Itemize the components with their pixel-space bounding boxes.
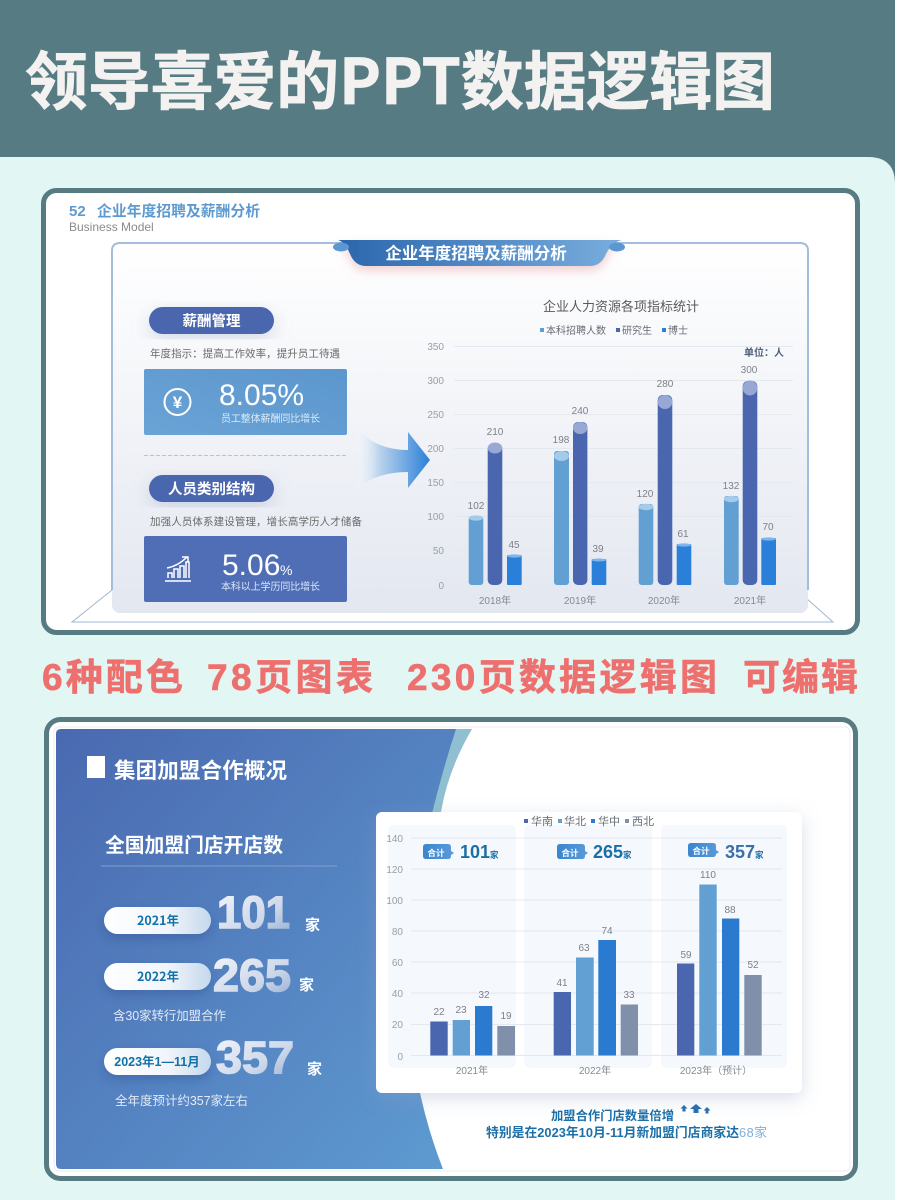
stat row: 2023: 357 bbox=[216, 1032, 294, 1083]
stat card: salary growth: 8.05% bbox=[219, 379, 304, 412]
bars 2020: 280 bbox=[657, 379, 674, 390]
icon: yen coin: ¥ bbox=[173, 393, 183, 412]
bars 2021: 300 bbox=[741, 365, 758, 376]
title: 领导喜爱的PPT数据逻辑图 bbox=[25, 32, 775, 123]
bars 2021 bbox=[723, 365, 776, 585]
stat row: 2022 bbox=[104, 950, 314, 1001]
bars 2022: 33 bbox=[623, 990, 635, 1001]
bars 2021 bbox=[430, 990, 515, 1056]
y axis labels: 50 bbox=[433, 546, 444, 557]
y axis labels: 140 bbox=[386, 834, 403, 845]
y axis labels bbox=[427, 342, 444, 592]
slide subheading: Business Model bbox=[69, 220, 154, 234]
teal curved band bbox=[400, 729, 472, 840]
x axis labels: 2018年 bbox=[479, 594, 511, 607]
bars 2019: 39 bbox=[592, 544, 604, 555]
perspective floor bbox=[72, 590, 833, 622]
stat card: salary growth bbox=[144, 369, 347, 435]
y axis labels: 0 bbox=[397, 1052, 403, 1063]
stat row: 2021: 家 bbox=[305, 914, 320, 935]
y axis labels: 300 bbox=[427, 376, 444, 387]
note: 2023: 全年度预计约357家左右 bbox=[115, 1093, 248, 1108]
legend bbox=[524, 814, 654, 828]
total tag 2023 bbox=[688, 842, 764, 862]
bars 2021: 70 bbox=[762, 522, 774, 533]
y axis labels: 150 bbox=[427, 478, 444, 489]
total tag 2023: 357 bbox=[725, 842, 755, 862]
bars 2021: 132 bbox=[723, 481, 740, 492]
total tag 2023: 合计 bbox=[692, 845, 710, 857]
bars 2023: 110 bbox=[700, 870, 716, 881]
stat card: education growth: 5.06 bbox=[222, 549, 280, 582]
x axis labels bbox=[479, 594, 766, 607]
bars 2023: 59 bbox=[680, 950, 692, 961]
stat row: 2023 bbox=[104, 1032, 322, 1083]
stat card: education growth: % bbox=[280, 562, 292, 578]
bars 2021: 23 bbox=[455, 1005, 467, 1016]
y axis labels: 20 bbox=[392, 1020, 403, 1031]
total tag 2021 bbox=[423, 842, 499, 862]
icon: up arrows bbox=[680, 1104, 710, 1114]
icon: rising bars bbox=[165, 557, 191, 581]
y axis labels: 100 bbox=[386, 896, 403, 907]
banner: selling points: 78页图表 bbox=[207, 657, 373, 698]
arrow bbox=[353, 423, 430, 490]
bars 2021: 19 bbox=[500, 1011, 512, 1022]
bars 2022: 74 bbox=[601, 926, 613, 937]
subheading: 全国加盟门店开店数 bbox=[105, 829, 283, 858]
banner: selling points: 6种配色 bbox=[42, 657, 183, 698]
conclusion text bbox=[486, 1108, 767, 1140]
y axis labels: 120 bbox=[386, 865, 403, 876]
slide title: 集团加盟合作概况 bbox=[114, 754, 287, 785]
blue curved background bbox=[56, 729, 456, 1169]
pill: staff structure bbox=[149, 475, 274, 502]
legend: 华南 bbox=[531, 814, 553, 828]
x axis labels: 2021年 bbox=[456, 1064, 488, 1077]
stat row: 2022: 家 bbox=[299, 974, 314, 995]
staff note: 加强人员体系建设管理，增长高学历人才储备 bbox=[150, 515, 362, 528]
stat row: 2022: 2022年 bbox=[137, 966, 179, 985]
chart card: stores by region bbox=[376, 812, 802, 1093]
legend: 本科招聘人数 bbox=[546, 324, 606, 337]
unit label: 单位：人 bbox=[744, 346, 784, 359]
bars 2022: 41 bbox=[556, 978, 568, 989]
bars 2020: 120 bbox=[637, 489, 654, 500]
bars 2018: 45 bbox=[508, 540, 520, 551]
legend: 华中 bbox=[598, 814, 620, 828]
y axis labels: 100 bbox=[427, 512, 444, 523]
x axis labels: 2020年 bbox=[648, 594, 680, 607]
inner slide card bbox=[112, 243, 808, 613]
total tag 2022 bbox=[557, 842, 632, 862]
stat row: 2021 bbox=[104, 887, 320, 938]
banner: selling points: 可编辑 bbox=[743, 657, 858, 698]
panel: recruitment and salary slide bbox=[44, 190, 858, 632]
chart: HR indicators bbox=[427, 299, 793, 607]
y axis labels bbox=[386, 834, 403, 1063]
y axis labels: 200 bbox=[427, 444, 444, 455]
bars 2020 bbox=[637, 379, 691, 585]
legend: 华北 bbox=[564, 814, 586, 828]
bars 2023 bbox=[677, 870, 762, 1056]
legend: 研究生 bbox=[622, 324, 652, 337]
legend bbox=[540, 324, 688, 337]
bars 2020: 61 bbox=[677, 529, 689, 540]
x axis labels: 2021年 bbox=[734, 594, 766, 607]
bars 2019: 240 bbox=[572, 406, 589, 417]
total tag 2021: 101 bbox=[460, 842, 490, 862]
total tag 2021: 家 bbox=[490, 849, 499, 861]
salary note: 年度指示：提高工作效率，提升员工待遇 bbox=[150, 347, 340, 360]
bars 2021: 32 bbox=[478, 990, 490, 1001]
pill: salary management bbox=[149, 307, 274, 334]
slide heading: 52 bbox=[69, 203, 86, 220]
panel: franchise overview slide bbox=[46, 720, 856, 1178]
icon: yen coin bbox=[164, 389, 190, 415]
x axis labels: 2022年 bbox=[579, 1064, 611, 1077]
bars 2022 bbox=[554, 926, 638, 1056]
stat row: 2023: 家 bbox=[307, 1058, 322, 1079]
y axis labels: 60 bbox=[392, 958, 403, 969]
stat card: education growth: 本科以上学历同比增长 bbox=[221, 580, 320, 593]
stat row: 2021: 2021年 bbox=[137, 910, 179, 929]
ribbon title: 企业年度招聘及薪酬分析 bbox=[385, 240, 567, 264]
bars 2019 bbox=[553, 406, 606, 585]
stat row: 2022: 265 bbox=[213, 950, 291, 1001]
conclusion text: 特别是在2023年10月-11月新加盟门店商家达 bbox=[486, 1125, 739, 1140]
legend: 博士 bbox=[668, 324, 688, 337]
bars 2021: 22 bbox=[433, 1007, 445, 1018]
total tag 2023: 家 bbox=[755, 849, 764, 861]
conclusion text: 68家 bbox=[739, 1125, 767, 1140]
ribbon title bbox=[333, 240, 625, 266]
y axis labels: 80 bbox=[392, 927, 403, 938]
total tag 2022: 家 bbox=[623, 849, 632, 861]
header band bbox=[0, 0, 895, 190]
note: 2022: 含30家转行加盟合作 bbox=[113, 1008, 226, 1023]
bars 2018: 102 bbox=[468, 501, 485, 512]
bars 2023: 52 bbox=[747, 960, 759, 971]
pill: salary management: 薪酬管理 bbox=[182, 310, 241, 331]
y axis labels: 40 bbox=[392, 989, 403, 1000]
stat card: education growth bbox=[144, 536, 347, 602]
bars 2018: 210 bbox=[487, 427, 504, 438]
dashed divider bbox=[144, 454, 348, 456]
slide heading: 企业年度招聘及薪酬分析 bbox=[97, 202, 260, 220]
banner: selling points bbox=[42, 657, 858, 698]
stat row: 2023: 2023年1—11月 bbox=[114, 1054, 200, 1069]
chart title: 企业人力资源各项指标统计 bbox=[543, 299, 699, 314]
bars 2022: 63 bbox=[578, 943, 590, 954]
x axis labels bbox=[456, 1064, 752, 1077]
bars 2019: 198 bbox=[553, 435, 570, 446]
bars 2018 bbox=[468, 427, 522, 585]
stat row: 2021: 101 bbox=[217, 887, 290, 938]
x axis labels: 2019年 bbox=[564, 594, 596, 607]
y axis labels: 250 bbox=[427, 410, 444, 421]
y axis labels: 350 bbox=[427, 342, 444, 353]
stat card: salary growth: 员工整体薪酬同比增长 bbox=[221, 412, 320, 425]
y axis labels: 0 bbox=[438, 581, 444, 592]
bars 2023: 88 bbox=[724, 905, 736, 916]
banner: selling points: 230页数据逻辑图 bbox=[407, 657, 717, 698]
legend: 西北 bbox=[632, 815, 654, 828]
x axis labels: 2023年（预计） bbox=[680, 1064, 752, 1077]
pill: staff structure: 人员类别结构 bbox=[168, 478, 255, 499]
total tag 2021: 合计 bbox=[427, 847, 445, 859]
total tag 2022: 265 bbox=[593, 842, 623, 862]
total tag 2022: 合计 bbox=[561, 847, 579, 859]
conclusion text: 加盟合作门店数量倍增 bbox=[551, 1108, 674, 1123]
